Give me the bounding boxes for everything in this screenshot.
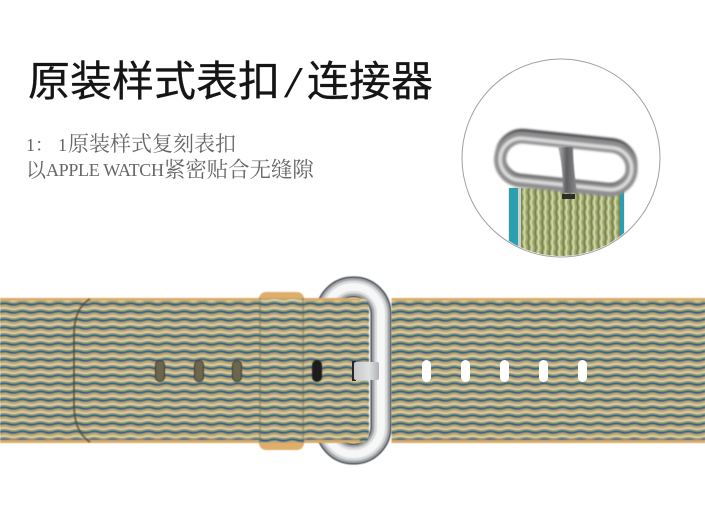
strap right section (392, 298, 705, 443)
detail circle: connector close-up (462, 59, 660, 268)
buckle ring (326, 287, 381, 454)
strap holes (covered, dark) (156, 360, 322, 382)
description text (26, 128, 314, 184)
fold shadow arc (74, 299, 90, 442)
pin shadow (562, 194, 575, 199)
strap holes (open, white) (422, 360, 587, 382)
connector pin (558, 147, 577, 193)
description text: 1 (58, 135, 67, 155)
description text: 原装样式复刻表扣 (68, 128, 236, 158)
buckle tongue (352, 361, 379, 381)
description text: 以 (26, 154, 47, 183)
strap left section (0, 298, 369, 443)
close-up connector ring (498, 132, 634, 193)
close-up strap (508, 187, 625, 256)
description text: 1： (26, 135, 53, 155)
main strap illustration (0, 287, 705, 454)
title: 原装样式表扣 (28, 48, 280, 109)
title: 连接器 (307, 48, 433, 109)
circle outline (462, 59, 660, 257)
description text: 紧密贴合无缝隙 (164, 153, 314, 184)
title: / (282, 61, 306, 106)
keeper loop (259, 292, 304, 450)
description text: APPLE WATCH (46, 160, 164, 180)
title (28, 48, 433, 109)
